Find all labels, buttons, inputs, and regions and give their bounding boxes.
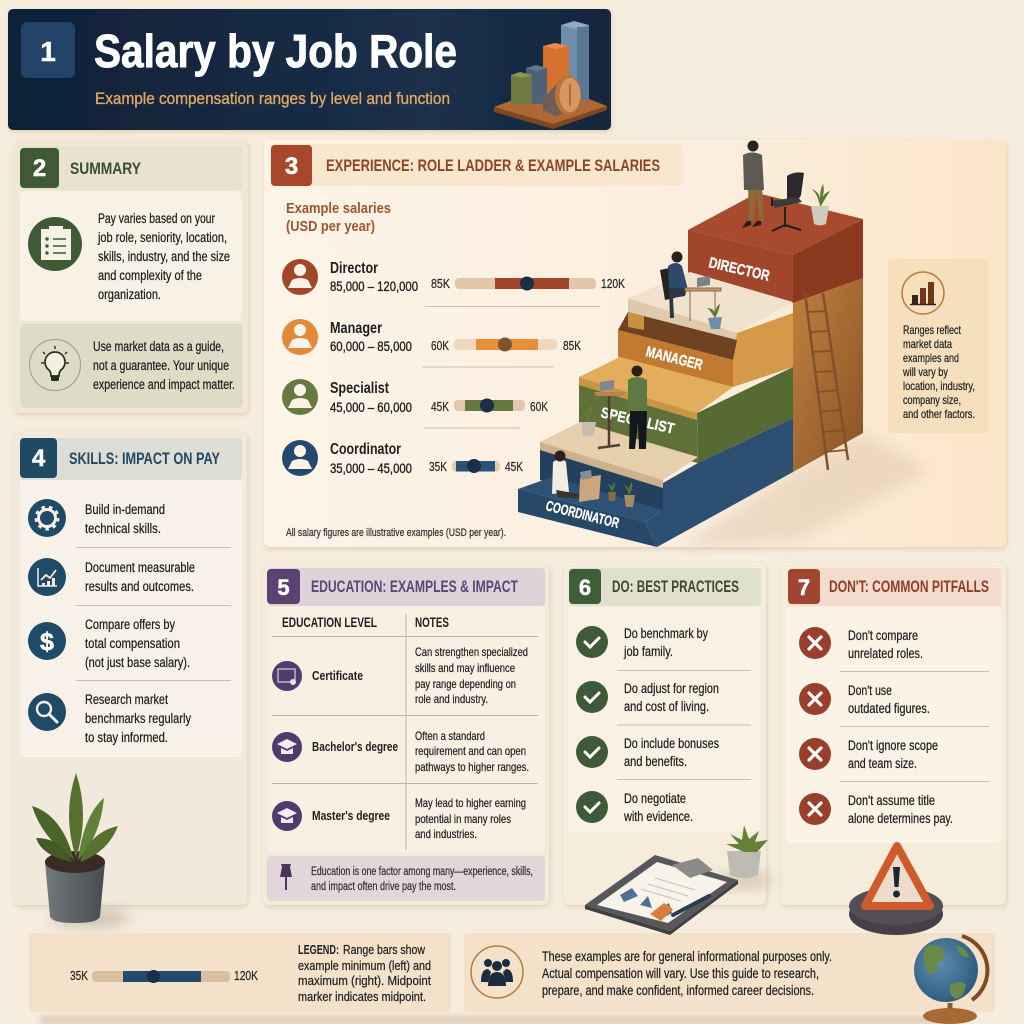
education note: certificate: Can strengthen specialized xyxy=(415,645,528,659)
skill text: technical skills: technical skills. xyxy=(85,521,161,536)
skill text: research benchmarks: to stay informed. xyxy=(85,730,168,745)
skill text: compare offers: (not just base salary). xyxy=(85,655,190,670)
education note: master xyxy=(415,796,526,841)
heading: education: EDUCATION: EXAMPLES & IMPACT xyxy=(311,577,518,596)
do item: benchmark xyxy=(576,626,708,659)
disclaimer text: Actual compensation will vary. Use this guide to research, xyxy=(542,966,819,981)
subtitle: Example compensation ranges by level and function xyxy=(95,90,450,108)
summary text xyxy=(97,211,230,302)
section number 5: 5 xyxy=(277,575,290,600)
do item: bonuses: Do include bonuses xyxy=(624,736,719,751)
range bar: manager xyxy=(431,338,582,353)
do item: region: and cost of living. xyxy=(624,699,709,714)
summary text: Pay varies based on your xyxy=(98,211,215,226)
legend text: example minimum (left) and xyxy=(298,958,431,973)
range bar: director: 85K xyxy=(431,277,451,291)
education note: bachelor: requirement and can open xyxy=(415,744,526,758)
legend text: LEGEND: xyxy=(298,942,339,957)
heading: skills: SKILLS: IMPACT ON PAY xyxy=(69,449,220,468)
legend panel xyxy=(29,933,451,1012)
range bar: coordinator: 35K xyxy=(429,460,448,474)
legend text: Range bars show xyxy=(343,942,425,957)
callout: ranges note: and other factors. xyxy=(903,407,975,421)
skill text: document results xyxy=(85,560,195,594)
footnote: All salary figures are illustrative examples (USD per year). xyxy=(286,527,506,539)
callout: ranges note xyxy=(888,259,989,433)
panel: experience role ladder xyxy=(264,140,1006,548)
education table: EDUCATION LEVEL xyxy=(282,615,377,630)
panel: don't common pitfalls xyxy=(781,563,1006,905)
range bar: coordinator: 45K xyxy=(505,460,524,474)
disclaimer text xyxy=(542,949,832,998)
skill text: research benchmarks: Research market xyxy=(85,692,168,707)
callout: market data: not a guarantee. Your unique xyxy=(93,358,229,373)
education note: bachelor: Often a standard xyxy=(415,729,485,743)
callout: education note: and impact often drive pay the most. xyxy=(311,881,456,893)
range bar: manager: 60K xyxy=(431,339,450,353)
don't item: title xyxy=(799,793,953,826)
section number 3 xyxy=(271,145,312,186)
section number 7: 7 xyxy=(798,575,810,600)
figure: director standing xyxy=(742,140,764,228)
panel: skills xyxy=(14,432,247,905)
section number 5 xyxy=(267,569,300,604)
do item: negotiate xyxy=(576,791,693,824)
range bar: specialist xyxy=(431,398,549,414)
don't item: unrelated roles xyxy=(799,627,923,661)
icon: bar chart and coin on tray xyxy=(494,21,607,129)
education note: master: potential in many roles xyxy=(415,812,511,826)
callout: education note: Education is one factor among many—experience, skills, xyxy=(311,866,533,878)
education note: bachelor: pathways to higher ranges. xyxy=(415,760,529,774)
section number 3: 3 xyxy=(285,153,298,180)
education table xyxy=(272,614,538,850)
legend range bar: 120K xyxy=(234,969,259,983)
icon: ladder xyxy=(805,293,848,470)
callout: education note xyxy=(267,856,545,901)
callout: ranges note: location, industry, xyxy=(903,379,975,393)
education note: master: and industries. xyxy=(415,827,477,841)
don't item: title: alone determines pay. xyxy=(848,811,953,826)
skill text: technical skills xyxy=(85,502,165,536)
role row: coordinator xyxy=(282,440,524,476)
do item: benchmark: job family. xyxy=(623,644,673,659)
legend text: marker indicates midpoint. xyxy=(298,989,426,1004)
do item: negotiate: Do negotiate xyxy=(624,791,686,806)
skill text: document results: Document measurable xyxy=(85,560,195,575)
icon: graduation cap xyxy=(272,732,302,762)
range bar: specialist: 60K xyxy=(530,400,549,414)
callout: ranges note: will vary by xyxy=(902,365,948,379)
illustration: clipboard and succulent xyxy=(585,825,773,935)
step label: specialist: SPECIALIST xyxy=(599,404,676,438)
range bar: director xyxy=(431,276,626,291)
panel: do best practices xyxy=(564,563,766,905)
skill text: compare offers: total compensation xyxy=(85,636,180,651)
do item: bonuses: and benefits. xyxy=(624,754,687,769)
callout: market data xyxy=(20,324,243,408)
icon: certificate xyxy=(272,661,302,691)
step label: coordinator: COORDINATOR xyxy=(544,498,621,532)
role row: manager: 60,000 – 85,000 xyxy=(330,338,412,354)
education note: certificate: pay range depending on xyxy=(415,677,516,691)
legend text xyxy=(298,942,431,1004)
figure: specialist standing at desk xyxy=(580,366,647,449)
illustration: isometric career staircase xyxy=(518,140,930,548)
figure: manager at desk xyxy=(660,252,722,329)
section number 4 xyxy=(20,438,57,478)
illustration: potted plant xyxy=(32,773,130,927)
section number 2 xyxy=(20,148,59,188)
summary text: organization. xyxy=(98,287,161,302)
education table: Certificate xyxy=(312,668,363,683)
chart subtitle xyxy=(286,200,391,235)
icon: growth chart xyxy=(28,558,66,596)
disclaimer text: These examples are for general informational purposes only. xyxy=(542,949,832,964)
role row: manager xyxy=(282,319,582,355)
do item: bonuses xyxy=(576,736,719,769)
education table: Master's degree xyxy=(312,808,390,823)
role row: coordinator: Coordinator xyxy=(330,441,401,458)
figure: coordinator at desk xyxy=(552,450,635,507)
role row: specialist: 45,000 – 60,000 xyxy=(330,399,412,415)
don't item: outdated figures xyxy=(799,683,930,716)
role row: director xyxy=(282,259,626,295)
legend range bar xyxy=(70,969,259,983)
role row: coordinator: 35,000 – 45,000 xyxy=(330,460,412,476)
callout: ranges note: company size, xyxy=(903,393,961,407)
title: Salary by Job Role xyxy=(94,25,457,77)
summary text: and complexity of the xyxy=(98,268,202,283)
range bar: director: 120K xyxy=(601,277,626,291)
don't item: scope: and team size. xyxy=(848,756,917,771)
figure: office chair xyxy=(771,172,804,231)
icon: dollar xyxy=(28,622,66,660)
range bar: manager: 85K xyxy=(563,339,582,353)
chart subtitle: Example salaries xyxy=(286,200,391,217)
do item: region xyxy=(576,681,719,714)
panel: education xyxy=(263,563,549,905)
figure: plant on top step xyxy=(811,184,830,226)
education note: certificate: skills and may influence xyxy=(415,661,515,675)
role row: specialist xyxy=(282,379,549,415)
chart subtitle: (USD per year) xyxy=(286,218,375,235)
callout: market data: experience and impact matter. xyxy=(93,377,235,392)
icon: people group xyxy=(471,946,523,998)
range bar: specialist: 45K xyxy=(431,400,450,414)
summary text: job role, seniority, location, xyxy=(97,230,227,245)
range bar: coordinator xyxy=(429,459,524,474)
heading: do: DO: BEST PRACTICES xyxy=(612,577,739,596)
disclaimer text: prepare, and make confident, informed career decisions. xyxy=(542,983,814,998)
icon: small bars xyxy=(902,272,944,314)
icon: gear xyxy=(28,499,66,537)
skill text: compare offers xyxy=(85,617,190,670)
role row: director: 85,000 – 120,000 xyxy=(330,278,418,294)
legend text: maximum (right). Midpoint xyxy=(298,973,431,988)
don't item: outdated figures: Don't use xyxy=(848,683,892,698)
illustration: globe xyxy=(914,936,987,1024)
role row: specialist: Specialist xyxy=(330,380,389,397)
don't item: scope: Don't ignore scope xyxy=(848,738,938,753)
callout: ranges note: market data xyxy=(903,337,952,351)
icon: master's cap xyxy=(272,801,302,831)
disclaimer panel xyxy=(464,933,995,1012)
section number 6 xyxy=(569,569,601,604)
heading: experience: EXPERIENCE: ROLE LADDER & EXAMPLE SALARIES xyxy=(326,156,660,175)
icon: checklist xyxy=(28,217,82,271)
skill text: document results: results and outcomes. xyxy=(85,579,194,594)
icon: push pin xyxy=(280,864,292,890)
education note: bachelor xyxy=(415,729,529,774)
don't item: unrelated roles: unrelated roles. xyxy=(848,646,923,661)
illustration: warning triangle on pedestal xyxy=(849,846,943,935)
education note: certificate xyxy=(415,645,528,706)
don't item: outdated figures: outdated figures. xyxy=(848,701,930,716)
education table: NOTES xyxy=(415,615,449,630)
education table: Bachelor's degree xyxy=(312,739,398,754)
skill text: research benchmarks: benchmarks regularly xyxy=(85,711,191,726)
don't item: title: Don't assume title xyxy=(848,793,935,808)
legend range bar: 35K xyxy=(70,969,89,983)
summary text: skills, industry, and the size xyxy=(98,249,230,264)
icon: light bulb xyxy=(30,340,80,390)
do item: benchmark: Do benchmark by xyxy=(624,626,708,641)
section number 1: 1 xyxy=(40,36,56,67)
section number 6: 6 xyxy=(579,575,591,600)
section number 7 xyxy=(788,569,820,604)
skill text: technical skills: Build in-demand xyxy=(85,502,165,517)
section number 1 xyxy=(21,22,75,78)
callout: ranges note: Ranges reflect xyxy=(903,323,961,337)
panel: summary xyxy=(14,140,248,413)
icon: magnifier xyxy=(28,693,66,731)
skill text: compare offers: Compare offers by xyxy=(85,617,175,632)
callout: market data: Use market data as a guide, xyxy=(93,339,224,354)
don't item: unrelated roles: Don't compare xyxy=(848,628,918,643)
heading: summary: SUMMARY xyxy=(70,159,142,178)
don't item: scope xyxy=(799,738,938,771)
skill text: research benchmarks xyxy=(85,692,191,745)
education note: certificate: role and industry. xyxy=(415,692,488,706)
section number 4: 4 xyxy=(32,445,46,472)
callout: ranges note: examples and xyxy=(903,351,959,365)
do item: region: Do adjust for region xyxy=(624,681,719,696)
role row: manager: Manager xyxy=(330,320,382,337)
step label: manager: MANAGER xyxy=(644,343,705,374)
role row: director: Director xyxy=(330,260,378,277)
step label: director: DIRECTOR xyxy=(707,254,771,285)
section number 2: 2 xyxy=(33,155,46,182)
icon: dollar: $ xyxy=(40,628,54,656)
do item: negotiate: with evidence. xyxy=(623,809,693,824)
education note: master: May lead to higher earning xyxy=(415,796,526,810)
header banner xyxy=(8,9,611,130)
